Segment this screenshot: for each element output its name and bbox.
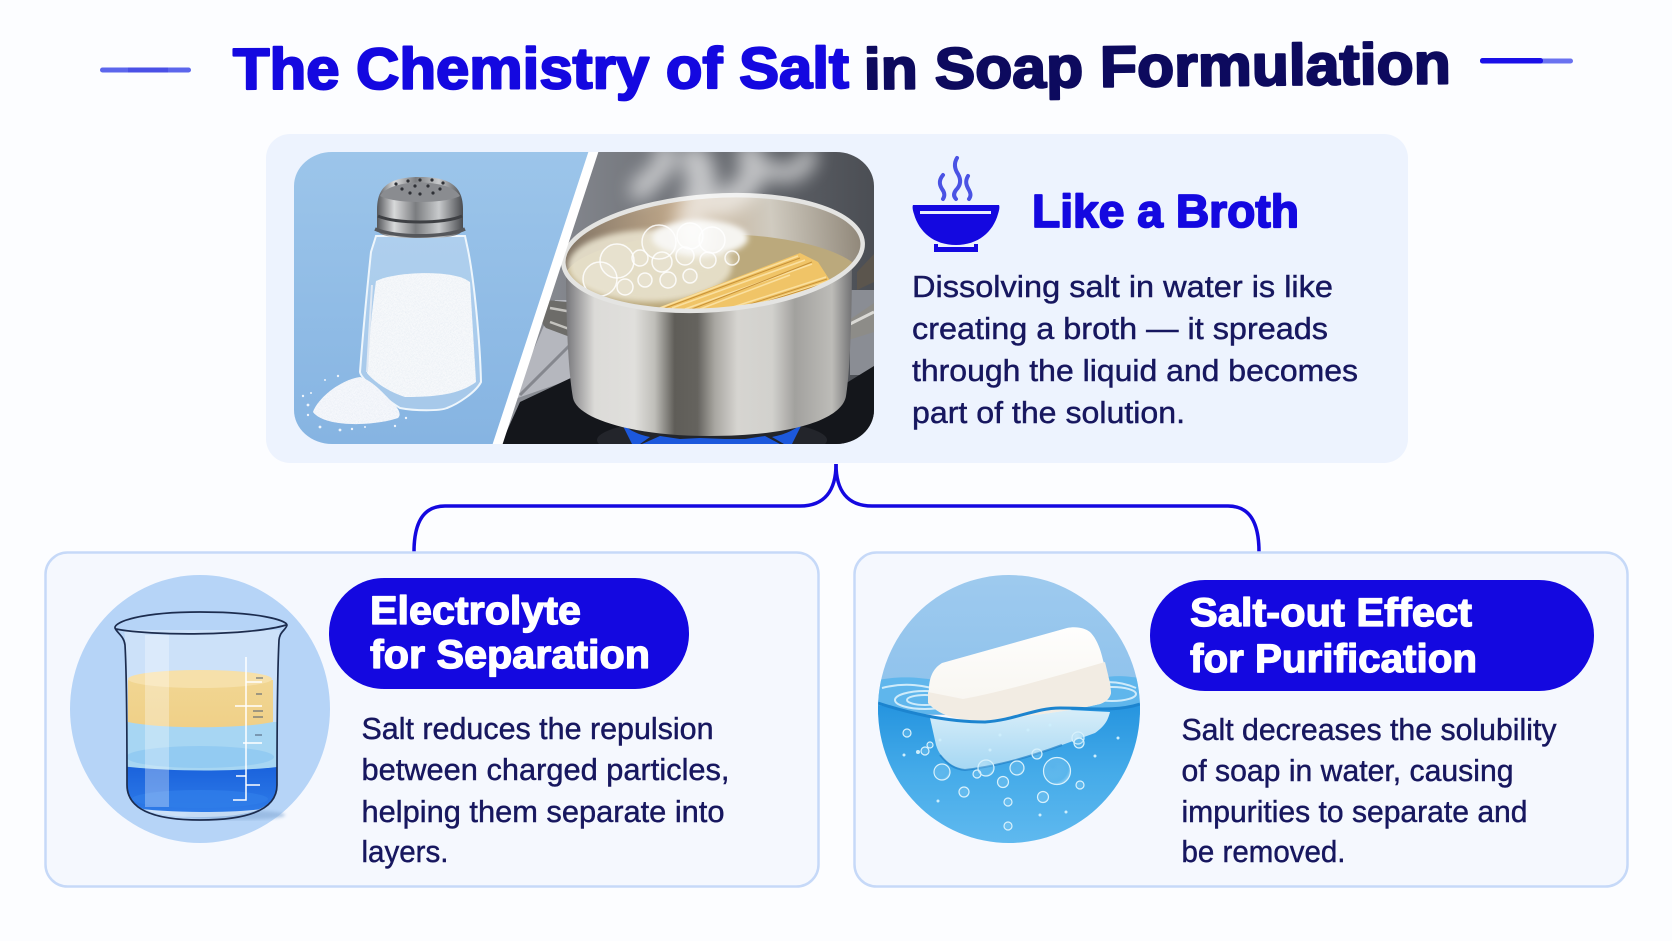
body text: [912, 269, 1358, 430]
salt pile: [313, 377, 400, 424]
pot body: [566, 269, 852, 436]
panel background: [266, 134, 1408, 463]
salt fill: [367, 273, 476, 397]
salt shaker: [302, 177, 481, 431]
body text: [362, 711, 730, 869]
body text: layers.: [362, 834, 448, 869]
body text: be removed.: [1182, 834, 1346, 869]
submerged soap edge: [940, 745, 1062, 770]
metal cap: [377, 177, 463, 238]
scale marks: [253, 678, 263, 735]
pot contents: [566, 218, 852, 309]
heading pill: [329, 578, 689, 689]
illustration: beaker with layers: [70, 575, 330, 843]
panel: salt-out effect for purification: [854, 552, 1628, 886]
pasta bundles: [655, 253, 831, 311]
circle backdrop: [70, 575, 330, 843]
body text: helping them separate into: [362, 794, 724, 829]
kitchen side background: [501, 152, 874, 444]
body text: Salt reduces the repulsion: [362, 711, 714, 746]
sky backdrop: [878, 575, 1140, 715]
title: [100, 31, 1573, 102]
salt side background: [294, 152, 589, 444]
panel background: [46, 552, 818, 886]
diagonal divider: [492, 150, 599, 446]
title accent line right: [1480, 58, 1573, 64]
body text: impurities to separate and: [1182, 794, 1528, 829]
pot rim: [561, 192, 865, 314]
title text: blue part: The Chemistry of Salt: [233, 36, 849, 102]
measuring scale: [233, 657, 262, 800]
pot left handle: [542, 300, 568, 336]
panel: like a broth: [266, 134, 1408, 463]
body text: between charged particles,: [362, 752, 730, 787]
boiling bubbles: [583, 223, 739, 296]
heading: like a broth: Like a Broth: [1032, 185, 1299, 237]
soap bar: [928, 627, 1111, 720]
pot right handle: [850, 304, 874, 339]
ripples: [882, 682, 1136, 709]
stove: [501, 366, 874, 444]
water line over soap: [878, 703, 1140, 722]
water surface band: [878, 676, 1140, 714]
icon: soup bowl: [913, 158, 999, 252]
pot right upper handle: [857, 254, 874, 290]
panel background: [854, 552, 1628, 886]
soap front bevel: [928, 662, 1111, 720]
title text: navy part: in Soap Formulation: [864, 31, 1451, 102]
heading pill: [1150, 580, 1594, 691]
heading pill: for Purification: [1190, 637, 1477, 681]
illustration: soap floating in water: [878, 575, 1140, 843]
tiny water specks: [902, 724, 1120, 816]
photo: salt shaker and boiling pot: [294, 150, 874, 462]
body text: through the liquid and becomes: [912, 353, 1358, 388]
heading pill: Electrolyte: [370, 589, 581, 633]
heading pill: for Separation: [370, 633, 650, 677]
panel: electrolyte for separation: [46, 552, 818, 886]
body text: part of the solution.: [912, 395, 1185, 430]
heading pill: Salt-out Effect: [1190, 591, 1472, 635]
underwater: [878, 704, 1140, 843]
scattered salt grains: [302, 375, 407, 431]
title accent line left: [100, 68, 191, 72]
beaker rim: [116, 625, 286, 634]
body text: creating a broth — it spreads: [912, 311, 1328, 346]
connector: branching bracket: [414, 464, 1259, 552]
burner flame: [624, 426, 801, 444]
body text: Dissolving salt in water is like: [912, 269, 1333, 304]
steam: [640, 152, 808, 240]
pot rim interior: [566, 197, 860, 270]
beaker shadow: [185, 810, 285, 820]
submerged soap: [930, 708, 1110, 770]
body text: Salt decreases the solubility: [1182, 712, 1557, 747]
beaker glass: [124, 630, 280, 817]
glass body: [360, 236, 481, 410]
bubbles: [903, 729, 1084, 830]
body text: of soap in water, causing: [1182, 753, 1514, 788]
liquid layers: [120, 635, 285, 812]
water: [568, 235, 852, 307]
body text: [1182, 712, 1557, 869]
beaker outline: [115, 612, 287, 820]
